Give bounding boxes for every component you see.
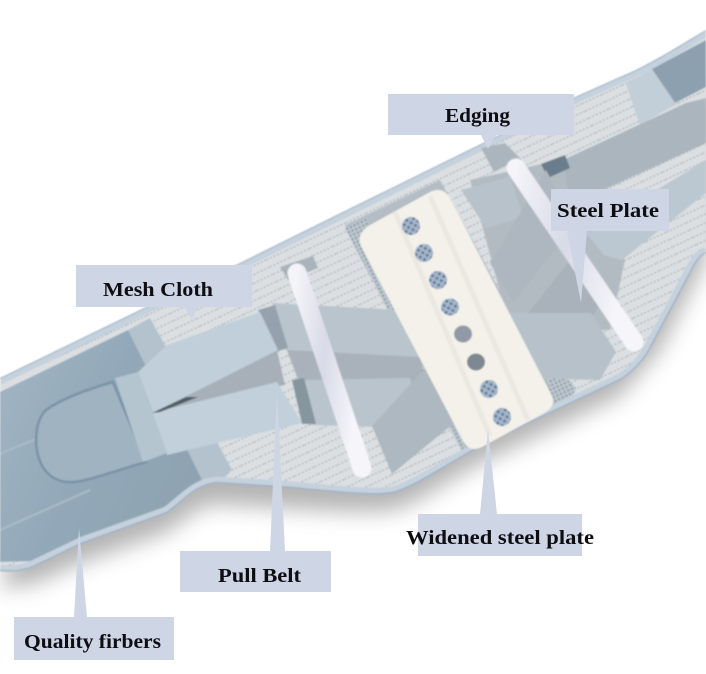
upper centre strap <box>461 177 523 228</box>
steel strip left <box>297 273 362 468</box>
left light panel <box>128 318 232 484</box>
diagonal strap <box>490 170 576 303</box>
left fabric pad <box>0 330 203 562</box>
plate ridges <box>395 196 528 436</box>
wedge behind left straps <box>172 350 286 408</box>
dark buckle right <box>541 155 570 178</box>
belt drop shadow <box>0 80 706 588</box>
right lower strap <box>586 160 706 260</box>
shaded area behind right straps <box>470 160 625 330</box>
second diagonal strap <box>528 260 600 315</box>
steel strip right <box>516 168 634 342</box>
velcro flap <box>36 382 146 482</box>
cross straps <box>272 170 616 474</box>
top tab at right strip <box>481 143 520 172</box>
top edge line <box>0 30 706 378</box>
horizontal strap <box>500 313 616 380</box>
lower left horizontal strap <box>272 303 420 357</box>
pad seams <box>0 438 90 530</box>
label: Mesh Cloth: Mesh Cloth <box>103 279 213 301</box>
label: Widened steel plate <box>406 430 594 556</box>
left lower strap <box>152 382 302 455</box>
label: Edging: Edging <box>445 105 510 127</box>
label: Steel Plate: Steel Plate <box>557 200 659 222</box>
shaded area behind left straps <box>286 350 422 383</box>
left upper strap <box>138 312 278 413</box>
lower diagonal strap <box>372 352 470 474</box>
top tab at left strip <box>280 256 318 280</box>
bottom binding edge <box>0 253 706 572</box>
dark buckle loops <box>258 305 288 352</box>
label: Edging <box>388 94 574 149</box>
widened steel plate <box>359 190 553 449</box>
label: Mesh Cloth <box>76 265 252 320</box>
top binding edge <box>0 30 706 378</box>
label: Widened steel plate: Widened steel plate <box>406 527 594 549</box>
label: Quality firbers: Quality firbers <box>24 631 161 653</box>
label: Pull Belt: Pull Belt <box>218 565 301 587</box>
bottom edge line <box>0 253 706 572</box>
label: Pull Belt <box>180 390 331 592</box>
label: Steel Plate <box>551 189 669 303</box>
plate holes <box>402 217 511 426</box>
right upper strap <box>563 98 706 205</box>
lower strap <box>305 378 424 428</box>
label: Quality firbers <box>14 528 174 660</box>
flap band <box>115 372 167 462</box>
right light panel <box>626 69 676 125</box>
central shaded channel <box>345 180 556 405</box>
right fabric pad <box>650 40 706 104</box>
gap shadow <box>152 397 198 413</box>
